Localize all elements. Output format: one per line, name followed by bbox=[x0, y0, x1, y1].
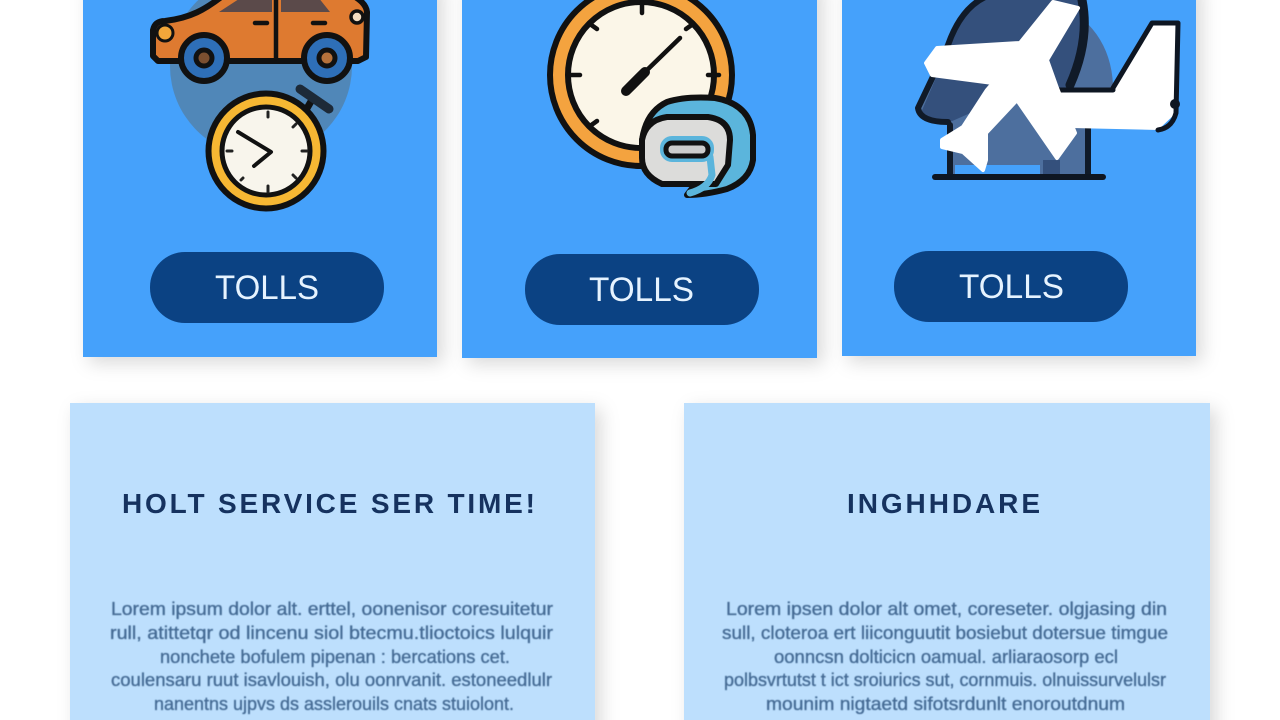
panel: left text block bbox=[70, 403, 595, 720]
panel: airplane card bbox=[842, 0, 1196, 356]
button: tolls bbox=[894, 251, 1128, 322]
button: tolls: TOLLS bbox=[589, 271, 694, 309]
panel: car and stopwatch card bbox=[83, 0, 437, 357]
text block: right body copy: mounim nigtaetd sifotsrdunlt enoroutdnum bbox=[766, 694, 1125, 714]
text block: right body copy: Lorem ipsen dolor alt omet, coreseter. olgjasing din bbox=[726, 599, 1167, 619]
button: tolls: TOLLS bbox=[959, 268, 1064, 306]
text block: right body copy bbox=[722, 599, 1168, 714]
heading: left panel: HOLT SERVICE SER TIME! bbox=[122, 488, 535, 519]
button: tolls bbox=[150, 252, 384, 323]
button: tolls: TOLLS bbox=[215, 269, 319, 307]
text block: left body copy: Lorem ipsum dolor alt. erttel, oonenisor coresuitetur bbox=[111, 599, 553, 619]
heading: right panel: INGHHDARE bbox=[847, 488, 1040, 519]
text block: right body copy: polbsvrtutst t ict sroiurics sut, cornmuis. olnuissurvelulsr bbox=[724, 670, 1166, 690]
text block: left body copy: nonchete bofulem pipenan : bercations cet. bbox=[160, 647, 510, 667]
panel: right text block bbox=[684, 403, 1210, 720]
text block: right body copy: oonncsn dolticicn oamual. arliaraosorp ecl bbox=[774, 647, 1118, 667]
icon: car with stopwatch bbox=[153, 0, 367, 208]
icon: clock with swirl bbox=[550, 0, 753, 195]
icon: airplane over silhouette bbox=[918, 0, 1180, 177]
text block: right body copy: sull, cloteroa ert liiconguutit bosiebut dotersue timgue bbox=[722, 623, 1168, 643]
text block: left body copy bbox=[110, 599, 553, 714]
text block: left body copy: coulensaru ruut isavlouish, olu oonrvanit. estoneedlulr bbox=[111, 670, 552, 690]
text block: left body copy: nanentns ujpvs ds asslerouils cnats stuiolont. bbox=[154, 694, 514, 714]
panel: clock card bbox=[462, 0, 817, 358]
text block: left body copy: rull, atittetqr od lincenu siol btecmu.tlioctoics lulquir bbox=[110, 623, 553, 643]
button: tolls bbox=[525, 254, 759, 325]
